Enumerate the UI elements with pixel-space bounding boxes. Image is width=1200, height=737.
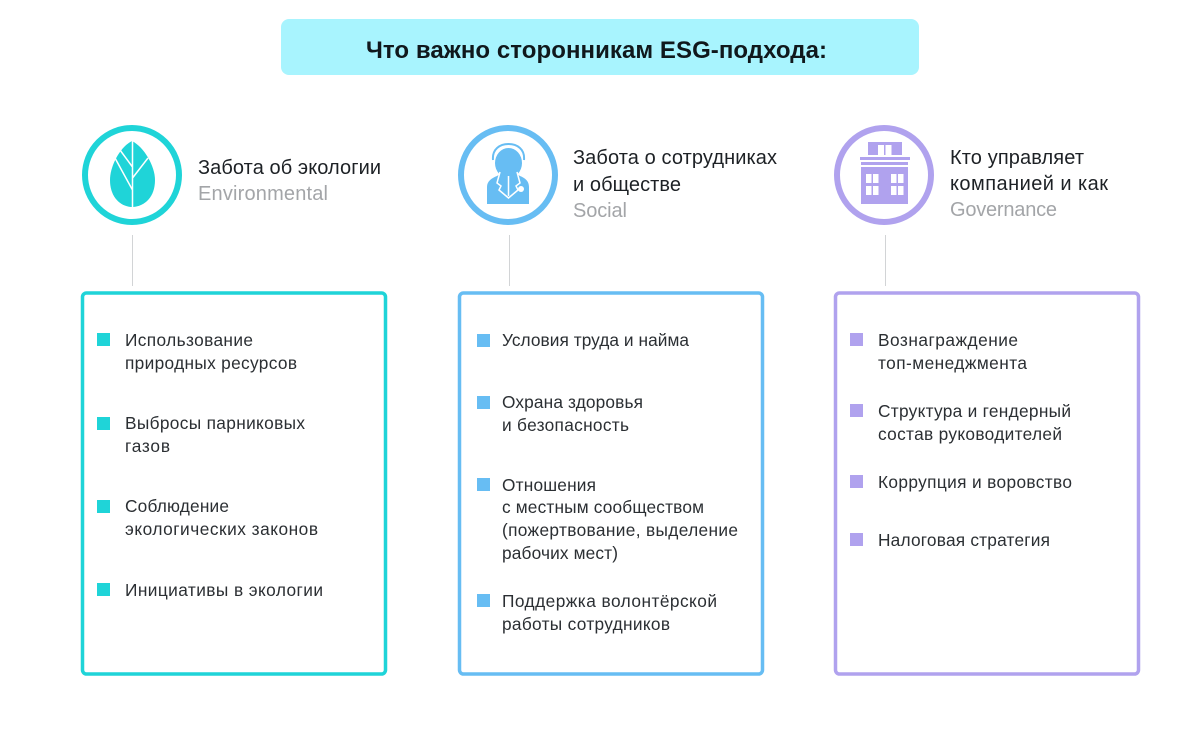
heading: environmental bbox=[198, 157, 381, 205]
bullet: top management pay: Вознаграждение bbox=[878, 330, 1018, 350]
heading: social: Забота о сотрудниках bbox=[573, 147, 777, 169]
bullet: natural resources: природных ресурсов bbox=[125, 353, 297, 373]
bullet: volunteering: Поддержка волонтёрской bbox=[502, 591, 717, 611]
bullet: environmental laws: экологических законов bbox=[125, 519, 318, 539]
column: Social bbox=[460, 128, 777, 674]
bullet: health and safety: Охрана здоровья bbox=[502, 392, 643, 412]
bullet: top management pay bbox=[850, 330, 1027, 373]
heading: governance: компанией и как bbox=[950, 173, 1108, 195]
connector line bbox=[885, 235, 886, 286]
heading: governance: Governance bbox=[950, 199, 1057, 221]
heading: environmental: Environmental bbox=[198, 183, 328, 205]
bullet: community relations: (пожертвование, выделение bbox=[502, 520, 738, 540]
icon: leaf bbox=[85, 128, 179, 222]
bullet: labor conditions: Условия труда и найма bbox=[502, 330, 689, 350]
bullet: greenhouse gases: газов bbox=[125, 436, 170, 456]
bullet: volunteering: работы сотрудников bbox=[502, 614, 670, 634]
panel: governance factors bbox=[836, 293, 1138, 674]
bullet: top management pay: топ-менеджмента bbox=[878, 353, 1027, 373]
bullet: environmental laws bbox=[97, 496, 318, 539]
icon: person bbox=[461, 128, 555, 222]
title banner: Что важно сторонникам ESG-подхода: bbox=[366, 37, 827, 64]
bullet: greenhouse gases bbox=[97, 413, 305, 456]
bullet: community relations: с местным сообществом bbox=[502, 497, 704, 517]
bullet: eco initiatives: Инициативы в экологии bbox=[125, 580, 323, 600]
column: Environmental bbox=[82, 128, 386, 674]
panel: environmental factors bbox=[82, 293, 386, 674]
connector line bbox=[509, 235, 510, 286]
bullet: health and safety bbox=[477, 392, 643, 435]
bullet: natural resources bbox=[97, 330, 297, 373]
bullet: leadership structure: состав руководителей bbox=[878, 424, 1062, 444]
bullet: corruption: Коррупция и воровство bbox=[878, 472, 1072, 492]
bullet: health and safety: и безопасность bbox=[502, 415, 629, 435]
bullet: tax strategy: Налоговая стратегия bbox=[878, 530, 1050, 550]
bullet: community relations: Отношения bbox=[502, 475, 596, 495]
connector line bbox=[132, 235, 133, 286]
heading: social bbox=[573, 147, 777, 222]
bullet: leadership structure bbox=[850, 401, 1071, 444]
column: Governance bbox=[836, 128, 1138, 674]
heading: governance: Кто управляет bbox=[950, 147, 1084, 169]
bullet: environmental laws: Соблюдение bbox=[125, 496, 229, 516]
bullet: community relations: рабочих мест) bbox=[502, 543, 618, 563]
bullet: greenhouse gases: Выбросы парниковых bbox=[125, 413, 305, 433]
title banner bbox=[281, 19, 919, 75]
heading: social: и обществе bbox=[573, 174, 681, 196]
bullet: volunteering bbox=[477, 591, 717, 634]
heading: social: Social bbox=[573, 200, 627, 222]
heading: governance bbox=[950, 147, 1108, 221]
bullet: natural resources: Использование bbox=[125, 330, 253, 350]
heading: environmental: Забота об экологии bbox=[198, 157, 381, 179]
bullet: community relations bbox=[477, 475, 738, 563]
panel: social factors bbox=[460, 293, 762, 674]
icon: building bbox=[837, 128, 931, 222]
bullet: leadership structure: Структура и гендерный bbox=[878, 401, 1071, 421]
